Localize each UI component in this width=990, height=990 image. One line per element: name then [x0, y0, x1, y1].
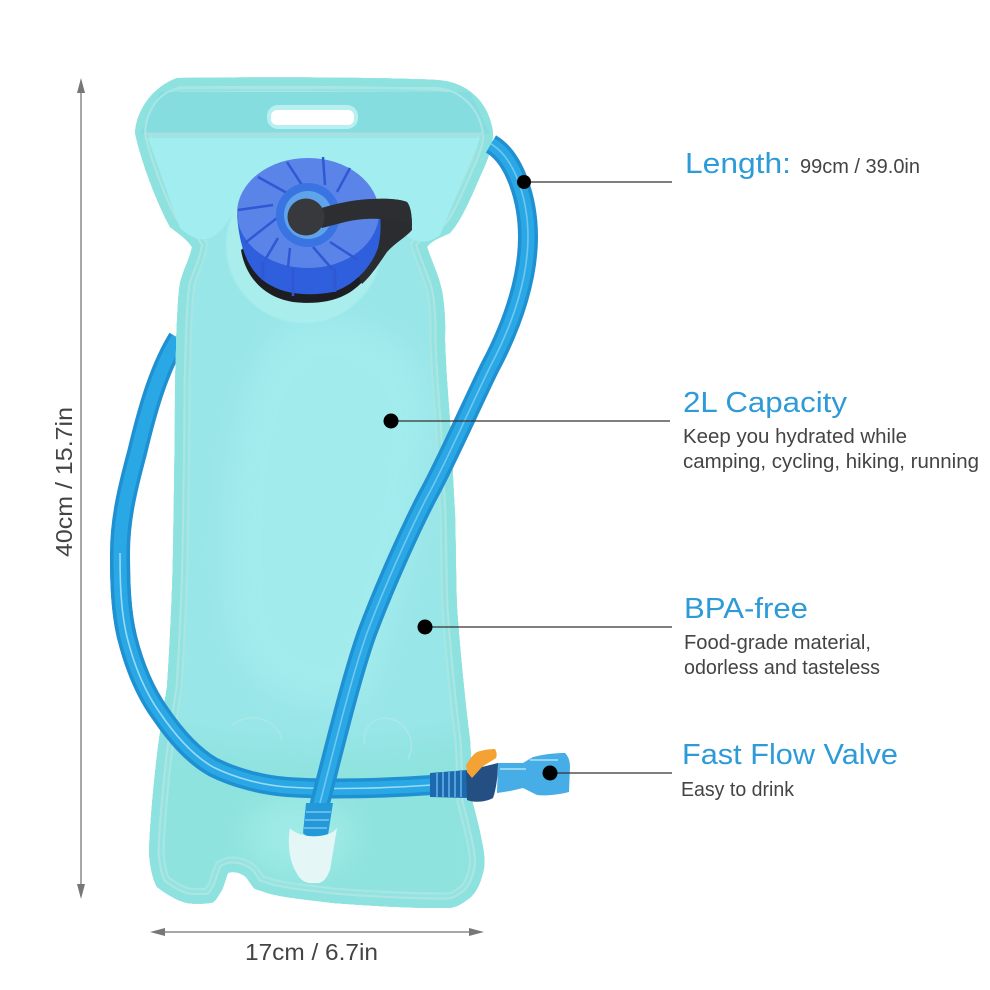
callout: length — [517, 148, 920, 189]
ribbed connector — [430, 770, 467, 798]
silicone end cap — [289, 828, 337, 883]
BPA heading: BPA-free — [684, 593, 808, 625]
top seal band — [140, 92, 490, 134]
black gasket — [241, 235, 383, 303]
collar around cap — [226, 206, 380, 322]
navy shut-off body — [466, 763, 498, 802]
cap ribs — [238, 157, 358, 296]
bite valve — [430, 749, 570, 802]
cap blue skirt — [237, 214, 381, 294]
length heading: Length: — [685, 148, 791, 180]
valve heading: Fast Flow Valve — [682, 739, 898, 771]
BPA description: Food-grade material, — [684, 632, 871, 654]
length value: 99cm / 39.0in — [800, 156, 920, 178]
orange lever — [466, 749, 497, 778]
mid body highlight — [242, 340, 412, 684]
width dimension label: 17cm / 6.7in — [245, 939, 378, 965]
hydration bag — [130, 77, 493, 920]
callout: capacity — [384, 387, 979, 473]
tube section behind bag — [120, 338, 178, 637]
cap centre boss — [276, 183, 340, 247]
callout: capacity: camping, cycling, hiking, running — [683, 451, 979, 473]
valve description: Easy to drink — [681, 779, 795, 801]
capacity heading: 2L Capacity — [683, 387, 848, 419]
bottom tube fitting — [289, 803, 337, 883]
height dimension arrow — [77, 78, 85, 899]
shoulder highlights — [148, 138, 480, 242]
main drinking tube — [315, 144, 528, 830]
cap top face — [237, 158, 379, 268]
width dimension arrow — [150, 928, 484, 936]
lower tube over bag — [120, 553, 432, 788]
carry handle slot — [267, 105, 358, 129]
strap tail — [345, 199, 412, 284]
callout: BPA-free: odorless and tasteless — [684, 657, 880, 679]
callout: BPA-free — [418, 593, 880, 679]
height dimension label: 40cm / 15.7in — [51, 407, 77, 557]
lower body tint — [164, 744, 469, 892]
capacity description: Keep you hydrated while — [683, 426, 907, 448]
callout: valve — [542, 739, 898, 801]
tether strap — [315, 199, 412, 228]
fill cap — [237, 157, 412, 303]
tether knob — [288, 198, 324, 236]
blue mouthpiece — [497, 753, 570, 795]
